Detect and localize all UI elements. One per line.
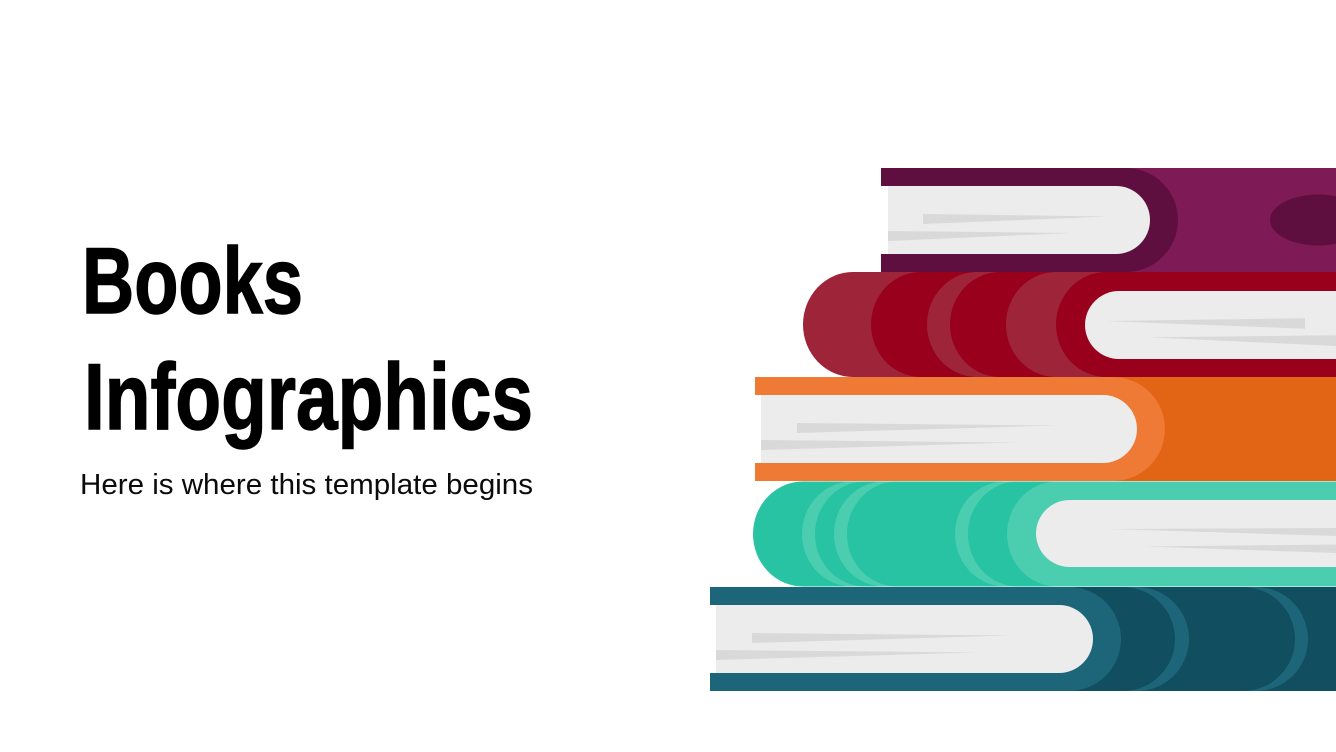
title: Infographics — [84, 344, 533, 449]
book 4: teal green — [753, 482, 1336, 586]
book 2: red — [803, 272, 1336, 377]
title — [82, 228, 533, 449]
subtitle: Here is where this template begins — [80, 469, 533, 501]
illustration: stack of books — [710, 168, 1336, 691]
book 1: purple — [881, 168, 1336, 272]
book 5: dark blue — [710, 587, 1336, 691]
book 3: orange — [755, 377, 1336, 481]
title: Books — [82, 228, 303, 333]
